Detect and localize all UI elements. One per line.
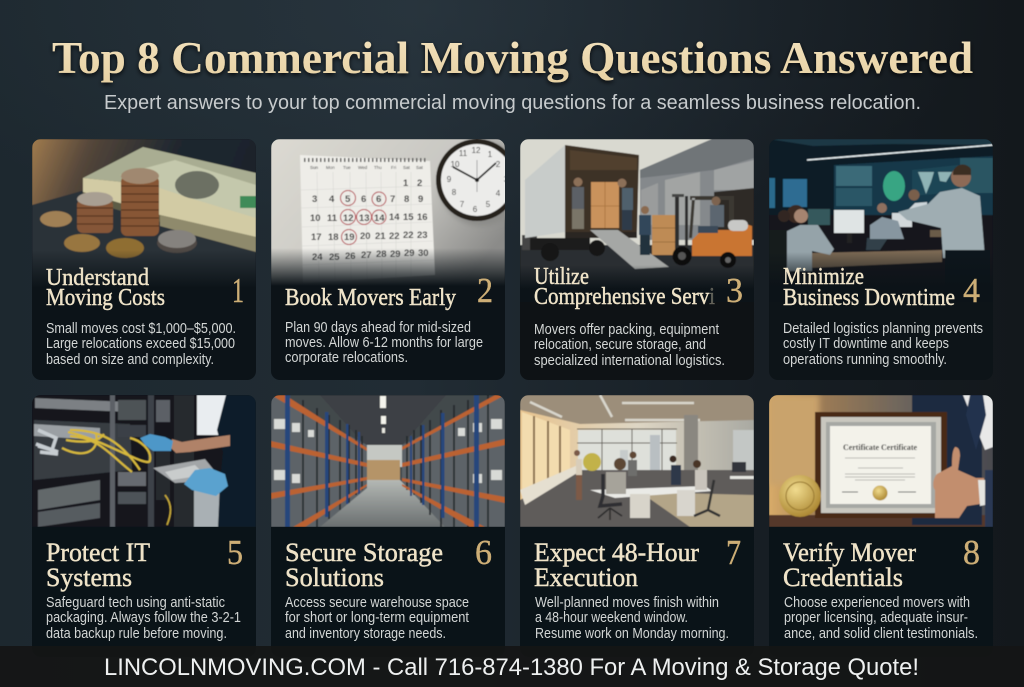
image: calendar and clock: 2 (496, 160, 501, 169)
footer call-to-action bar: LINCOLNMOVING.COM - Call 716-874-1380 For A Moving & Storage Quote! (104, 654, 919, 681)
subtitle: Expert answers to your top commercial moving questions for a seamless business relocation. (104, 91, 921, 114)
number: 4 (963, 271, 980, 310)
heading: Credentials (783, 563, 903, 592)
image: calendar and clock: 1 (403, 178, 409, 189)
panel: 4 minimize business downtime (769, 139, 993, 380)
heading (285, 538, 443, 592)
image: calendar and clock: Sat (416, 165, 424, 170)
body text (535, 594, 729, 642)
image: warehouse aisle (271, 395, 505, 527)
number: 8 (963, 533, 980, 572)
panel: 1 understand moving costs (32, 139, 256, 380)
body text: relocation, secure storage, and (534, 336, 706, 353)
heading: Business Downtime (783, 285, 955, 311)
body text: Large relocations exceed $15,000 (46, 335, 235, 352)
image: calendar and clock: 9 (447, 175, 452, 184)
number: 7 (726, 533, 741, 572)
image: calendar and clock: 23 (417, 230, 428, 241)
image: calendar and clock: 3 (312, 194, 317, 205)
body text: packaging. Always follow the 3-2-1 (46, 609, 241, 626)
body text: Plan 90 days ahead for mid-sized (285, 319, 471, 336)
image: calendar and clock: 29 (390, 249, 401, 260)
heading (534, 538, 699, 592)
panel: 5 protect it systems (32, 395, 256, 657)
image: calendar and clock: 11 (459, 149, 468, 158)
heading: Understand (46, 265, 149, 291)
body text: for short or long-term equipment (285, 609, 470, 626)
image: control room (769, 139, 993, 272)
heading: Book Movers Early (285, 285, 456, 311)
body text (784, 594, 978, 642)
heading: Verify Mover (783, 538, 916, 567)
heading (534, 264, 715, 310)
body text (285, 319, 483, 366)
image: calendar and clock: 30 (418, 248, 429, 259)
body text (46, 320, 236, 368)
image: calendar and clock: 17 (311, 232, 322, 243)
image: calendar and clock: 14 (374, 213, 385, 224)
image: calendar and clock: 10 (310, 213, 321, 224)
number: 3 (726, 271, 743, 310)
heading: Secure Storage (285, 538, 443, 567)
image: calendar and clock: 25 (329, 252, 340, 263)
body text: Detailed logistics planning prevents (783, 320, 983, 337)
image: calendar and clock: 22 (389, 231, 400, 242)
panel: 7 expect 48-hour execution (520, 395, 754, 657)
image: sunlit office (520, 395, 754, 527)
body text: ance, and solid client testimonials. (784, 625, 978, 642)
body text: Choose experienced movers with (784, 594, 970, 611)
panel: 6 secure storage solutions (271, 395, 505, 657)
body text: Resume work on Monday morning. (535, 625, 729, 642)
heading (783, 264, 955, 311)
image: calendar and clock: 11 (327, 213, 338, 224)
image: calendar and clock: 14 (389, 212, 400, 223)
heading (46, 265, 165, 311)
image: calendar and clock: 8 (452, 188, 457, 197)
image: calendar and clock: Fri (391, 165, 396, 170)
image: calendar and clock: 5 (345, 194, 351, 205)
heading (783, 538, 916, 592)
panel: 2 book movers early (271, 139, 524, 380)
image: calendar and clock: 4 (496, 189, 501, 198)
body text: and inventory storage needs. (285, 625, 446, 642)
body text: moves. Allow 6-12 months for large (285, 334, 483, 351)
image: calendar and clock: 10 (451, 160, 460, 169)
heading: Comprehensive Servi (534, 284, 715, 310)
image: calendar and clock: Tue (343, 165, 351, 170)
body text: a 48-hour weekend window. (535, 609, 688, 626)
image: calendar and clock: 21 (375, 231, 386, 242)
body text: proper licensing, adequate insur- (784, 609, 968, 626)
image: calendar and clock: 7 (460, 200, 465, 209)
panel: 8 verify mover credentials (769, 395, 993, 657)
image: calendar and clock: 6 (473, 205, 478, 214)
image: calendar and clock: 19 (344, 232, 355, 243)
body text: based on size and complexity. (46, 351, 214, 368)
image: calendar and clock: 20 (360, 231, 371, 242)
body text: costly IT downtime and keeps (783, 335, 949, 352)
image: calendar and clock: 5 (486, 200, 491, 209)
title: Top 8 Commercial Moving Questions Answered (52, 32, 973, 83)
body text: Access secure warehouse space (285, 594, 469, 611)
image: calendar and clock: Sat (403, 165, 411, 170)
image: calendar and clock: 18 (328, 232, 339, 243)
body text (783, 320, 983, 368)
body text: specialized international logistics. (534, 352, 725, 369)
image: calendar and clock: 9 (418, 194, 423, 205)
image: server rack (32, 395, 256, 527)
heading: Execution (534, 563, 638, 592)
body text: Movers offer packing, equipment (534, 321, 720, 338)
heading: Systems (46, 563, 132, 592)
body text: data backup rule before moving. (46, 625, 227, 642)
heading: Minimize (783, 264, 864, 290)
number: 1 (232, 271, 244, 310)
image: calendar and clock: 6 (361, 194, 366, 205)
image: calendar and clock: 22 (403, 230, 414, 241)
image: framed certificate: Certificate Certificate (843, 442, 917, 452)
image: calendar and clock: Sun (310, 165, 319, 170)
body text (285, 594, 470, 642)
image: calendar and clock: 4 (329, 194, 335, 205)
image: calendar and clock: 16 (417, 212, 428, 223)
body text (46, 594, 241, 642)
panel: 3 utilize comprehensive services (520, 139, 754, 380)
number: 5 (227, 533, 243, 572)
heading: Solutions (285, 563, 384, 592)
body text: operations running smoothly. (783, 351, 947, 368)
body text (534, 321, 725, 369)
number: 6 (475, 533, 492, 572)
image: calendar and clock: 6 (376, 194, 381, 205)
image: calendar and clock: 12 (343, 213, 354, 224)
image: calendar and clock: 27 (361, 250, 372, 261)
image: calendar and clock: 8 (404, 194, 409, 205)
image: calendar and clock: 13 (359, 213, 370, 224)
body text: Well-planned moves finish within (535, 594, 719, 611)
image: calendar and clock: 7 (390, 194, 395, 205)
heading: Protect IT (46, 538, 150, 567)
image: calendar and clock: 24 (312, 252, 323, 263)
number: 2 (477, 271, 493, 310)
image: calendar and clock: 15 (403, 212, 414, 223)
image: truck and forklift (520, 139, 754, 284)
image: calendar and clock: 12 (472, 146, 481, 155)
body text: Safeguard tech using anti-static (46, 594, 225, 611)
image: calendar and clock: 26 (345, 251, 356, 262)
image: calendar and clock: Mon (326, 165, 335, 170)
image: calendar and clock: 2 (417, 178, 422, 189)
body text: Small moves cost $1,000–$5,000. (46, 320, 236, 337)
image: calendar and clock: Wed (358, 165, 368, 170)
image: calendar and clock: 1 (488, 150, 493, 159)
image: calendar and clock: 3 (504, 175, 509, 184)
image: cash and coins (32, 139, 256, 278)
footer call-to-action bar (0, 646, 1024, 687)
heading (46, 538, 150, 592)
heading: Utilize (534, 264, 589, 290)
image: calendar and clock: Thu (374, 165, 382, 170)
image: calendar and clock: 29 (404, 248, 415, 259)
image: calendar and clock: 28 (376, 249, 387, 260)
body text: corporate relocations. (285, 349, 408, 366)
heading: Moving Costs (46, 285, 165, 311)
heading: Expect 48-Hour (534, 538, 699, 567)
image: framed certificate (769, 395, 993, 527)
image: calendar and clock (271, 139, 505, 284)
